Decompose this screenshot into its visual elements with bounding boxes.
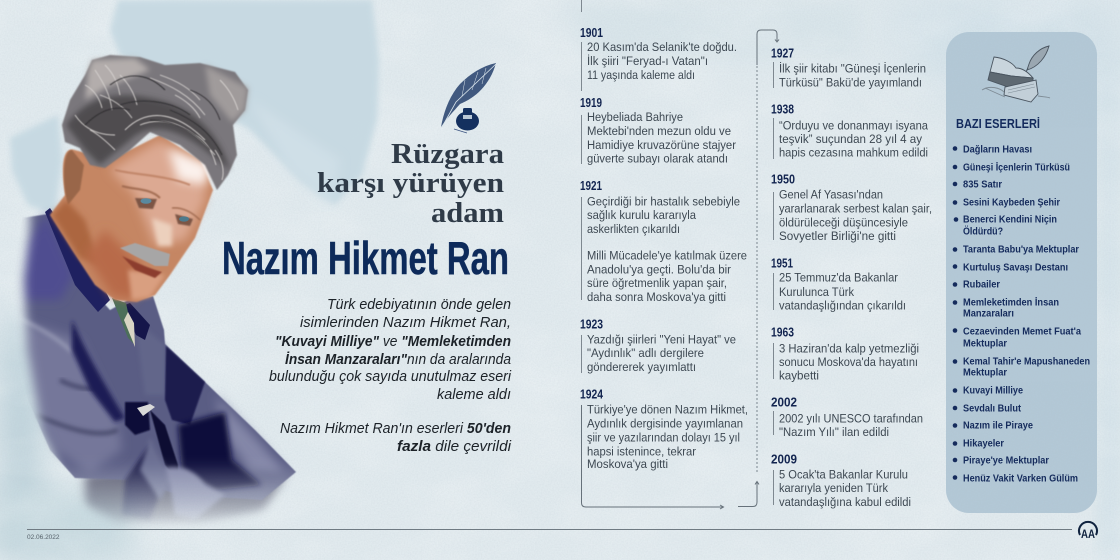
coat collar <box>45 208 110 312</box>
list of works: Dağların Havası <box>963 144 1032 156</box>
timeline column 1: 11 yaşında kaleme aldı <box>587 68 695 82</box>
intro text: Nazım Hikmet Ran'ın eserleri 50'den <box>280 420 511 437</box>
list of works: Cezaevinden Memet Fuat'a <box>963 326 1081 338</box>
list of works: Mektuplar <box>963 368 1007 378</box>
list of works <box>953 144 1090 484</box>
list of works: Taranta Babu'ya Mektuplar <box>963 244 1079 256</box>
icon: AA logo <box>1079 522 1097 541</box>
title: Rüzgara karşı yürüyen adam: karşı yürüyen <box>317 168 504 199</box>
timeline column 1: Anadolu'ya geçti. Bolu'da bir <box>587 262 731 276</box>
timeline column 1: Aydınlık dergisinde yayımlanan <box>587 416 743 430</box>
timeline column 1: Yazdığı şiirleri "Yeni Hayat" ve <box>587 332 736 346</box>
list of works: Güneşi İçenlerin Türküsü <box>963 160 1070 174</box>
timeline column 2: “Orduyu ve donanmayı isyana <box>779 118 928 132</box>
timeline column 2: 1938 <box>771 102 794 116</box>
timeline column 1: İlk şiiri "Feryad-ı Vatan"ı <box>587 54 708 68</box>
timeline column 2: 1927 <box>771 46 794 60</box>
timeline column 2: 25 Temmuz'da Bakanlar <box>779 270 898 284</box>
list of works: Kuvayi Milliye <box>963 386 1023 396</box>
coat <box>12 214 296 500</box>
timeline column 1: askerlikten çıkarıldı <box>587 222 680 236</box>
timeline column 1: "Aydınlık" adlı dergilere <box>587 346 704 360</box>
timeline column 2: 1951 <box>771 256 793 270</box>
intro text: kaleme aldı <box>437 386 511 403</box>
arrow: timeline continues to the right <box>582 405 724 509</box>
list of works: Hikayeler <box>963 438 1004 450</box>
timeline column 2: vatandaşlığından çıkarıldı <box>779 298 906 312</box>
list of works: Henüz Vakit Varken Gülüm <box>963 474 1078 484</box>
title: Rüzgara karşı yürüyen adam <box>317 139 504 229</box>
list of works: Sesini Kaybeden Şehir <box>963 198 1060 208</box>
timeline column 2 <box>771 46 932 509</box>
timeline column 1 <box>580 0 748 509</box>
timeline column 1: Heybeliada Bahriye <box>587 110 683 124</box>
heading: BAZI ESERLERİ: BAZI ESERLERİ <box>956 116 1040 131</box>
date: 02.06.2022 <box>27 534 60 541</box>
timeline column 1: süre öğretmenlik yapan şair, <box>587 276 727 290</box>
panel: some works <box>946 32 1097 513</box>
face and ear <box>50 135 213 302</box>
timeline column 1: Hamidiye kruvazörüne stajyer <box>587 138 736 152</box>
intro text: isimlerinden Nazım Hikmet Ran, <box>300 314 511 331</box>
timeline column 2: Genel Af Yasası'ndan <box>779 188 883 202</box>
list of works: Piraye'ye Mektuplar <box>963 456 1049 466</box>
timeline column 1: Milli Mücadele'ye katılmak üzere <box>587 248 747 262</box>
timeline column 1: 1924 <box>580 388 603 402</box>
timeline column 2: Sovyetler Birliği'ne gitti <box>779 229 896 243</box>
timeline column 2: Türküsü" Bakü'de yayımlandı <box>779 76 922 90</box>
timeline column 2: 5 Ocak'ta Bakanlar Kurulu <box>779 468 908 482</box>
timeline column 1: şiir ve yazılarından dolayı 15 yıl <box>587 430 740 444</box>
timeline column 2: kaybetti <box>779 368 819 382</box>
timeline column 2: "Nazım Yılı" ilan edildi <box>779 425 889 439</box>
list of works: Rubailer <box>963 280 1000 290</box>
timeline column 1: Geçirdiği bir hastalık sebebiyle <box>587 194 740 208</box>
icon: AA logo: AA <box>1081 527 1095 541</box>
footer rule <box>27 528 1072 530</box>
list of works: Memleketimden İnsan <box>963 296 1059 308</box>
intro text: "Kuvayi Milliye" ve "Memleketimden <box>275 333 511 350</box>
timeline column 2: hapis cezasına mahkum edildi <box>779 146 928 160</box>
timeline column 1: 1923 <box>580 318 603 332</box>
timeline column 1: sağlık kurulu kararıyla <box>587 208 696 222</box>
title: Rüzgara karşı yürüyen adam: adam <box>431 198 504 229</box>
timeline column 2: sonucu Moskova'da hayatını <box>779 355 918 369</box>
intro text <box>269 296 512 455</box>
timeline column 1: Moskova'ya gitti <box>587 457 668 471</box>
list of works: Kemal Tahir'e Mapushaneden <box>963 356 1090 368</box>
timeline column 1: Türkiye'ye dönen Nazım Hikmet, <box>587 402 748 416</box>
list of works: Nazım ile Piraye <box>963 420 1033 432</box>
timeline column 1: güverte subayı olarak atandı <box>587 152 728 166</box>
timeline column 2: Kurulunca Türk <box>779 285 855 299</box>
timeline column 2: vatandaşlığına kabul edildi <box>779 495 911 509</box>
watercolor blotch behind the head <box>10 0 379 215</box>
timeline column 2: kararıyla yeniden Türk <box>779 481 889 495</box>
portrait of Nazım Hikmet <box>12 55 296 525</box>
timeline column 1: Mektebi'nden mezun oldu ve <box>587 124 731 138</box>
timeline column 2: İlk şiir kitabı "Güneşi İçenlerin <box>779 62 926 76</box>
timeline column 2: öldürüleceği düşüncesiyle <box>779 216 908 230</box>
timeline column 1: 1919 <box>580 96 602 110</box>
list of works: Kurtuluş Savaşı Destanı <box>963 262 1068 274</box>
intro text: fazla dile çevrildi <box>397 438 512 455</box>
timeline column 1: göndererek yayımlattı <box>587 360 696 374</box>
timeline column 2: 1950 <box>771 172 795 186</box>
timeline column 2: teşvik” suçundan 28 yıl 4 ay <box>779 132 923 146</box>
intro text: İnsan Manzaraları"nın da aralarında <box>285 351 511 368</box>
icon: quill and inkwell <box>441 63 496 133</box>
timeline column 1: daha sonra Moskova'ya gitti <box>587 290 726 304</box>
intro text: bulunduğu çok sayıda unutulmaz eseri <box>269 368 512 385</box>
timeline column 2: 1963 <box>771 326 794 340</box>
arrow: dotted connector between columns <box>738 30 779 506</box>
timeline column 2: yararlanarak serbest kalan şair, <box>779 202 932 216</box>
title: Rüzgara karşı yürüyen adam: Rüzgara <box>391 139 504 170</box>
icon: open books and quill <box>982 46 1050 102</box>
timeline column 1: hapsi istenince, tekrar <box>587 444 696 458</box>
timeline column 1: 1901 <box>580 26 603 40</box>
list of works: Benerci Kendini Niçin <box>963 214 1057 226</box>
list of works: Öldürdü? <box>963 224 1003 238</box>
timeline column 2: 2002 yılı UNESCO tarafından <box>779 412 923 426</box>
timeline column 2: 2009 <box>771 452 797 466</box>
intro text: Türk edebiyatının önde gelen <box>327 296 511 313</box>
shirt and tie <box>112 298 135 345</box>
list of works: Sevdalı Bulut <box>963 404 1021 414</box>
list of works: 835 Satır <box>963 180 1002 190</box>
hair <box>62 55 248 190</box>
shadow below the figure <box>78 478 289 525</box>
list of works: Mektuplar <box>963 338 1007 350</box>
list of works: Manzaraları <box>963 308 1014 320</box>
heading: Nazım Hikmet Ran: Nazım Hikmet Ran <box>222 232 509 284</box>
timeline column 1: 1921 <box>580 179 602 193</box>
timeline column 2: 3 Haziran'da kalp yetmezliği <box>779 342 919 356</box>
timeline column 1: 20 Kasım'da Selanik'te doğdu. <box>587 40 737 54</box>
timeline column 2: 2002 <box>771 396 797 410</box>
